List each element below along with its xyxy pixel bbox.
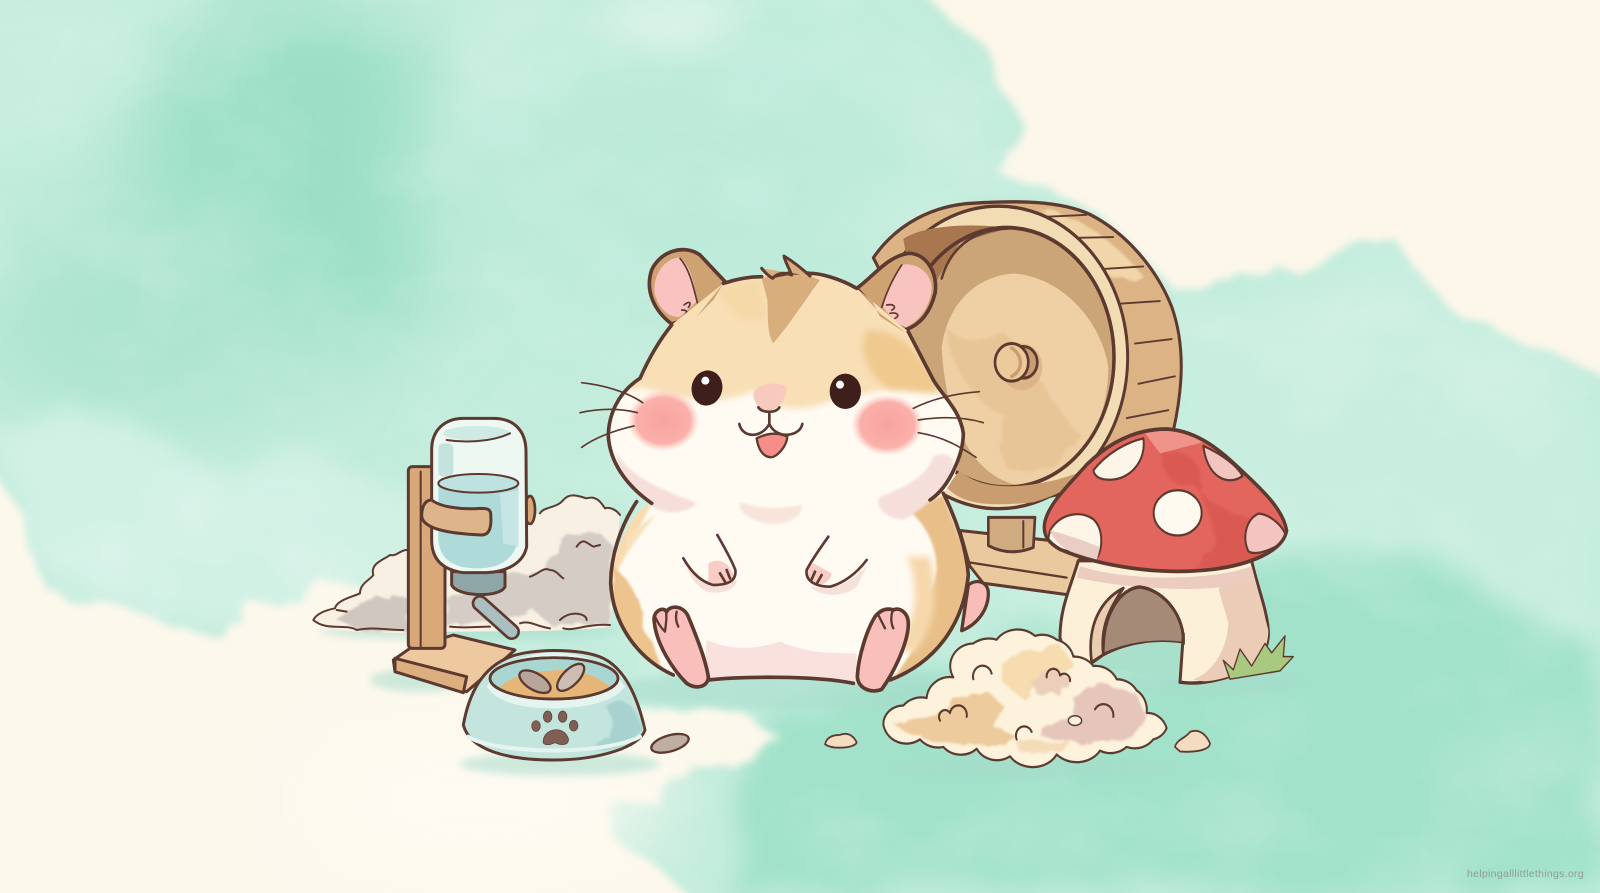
wheel drum [873,202,1181,506]
nose [753,384,787,411]
head stripe [762,274,820,343]
cream wash bottom left [0,425,780,893]
right ear [857,253,936,330]
hamster wheel [869,202,1181,509]
hamster [580,250,988,691]
water bottle [422,418,535,632]
water bottle stand [393,467,515,693]
mushroom door [1103,587,1183,655]
wheel back plate [942,274,1108,485]
bottle nozzle [480,603,512,632]
mushroom spots [1047,438,1287,559]
wheel stand [960,517,1080,596]
left eye [688,368,726,408]
whiskers [580,383,983,457]
bottle glass [432,418,527,573]
loose seed [649,730,691,756]
litter pile right [883,630,1167,767]
wheel axle [1001,344,1042,390]
mouth [739,407,802,457]
left cheek [627,390,699,451]
bottle water [438,483,518,568]
mushroom house [1044,429,1287,683]
left foot [654,607,708,687]
left arm [683,535,735,585]
ground shadows [320,624,1305,780]
cream wash top right [905,0,1600,395]
wheel inner [899,228,1114,487]
bowl food [500,670,610,698]
litter crumb left [825,734,857,748]
body silhouette [608,273,968,683]
hind foot [962,582,988,631]
right cheek [851,394,923,456]
mushroom stem [1060,561,1268,683]
grey litter pile [313,495,620,633]
paw print [532,711,578,745]
left ear [649,250,727,324]
water bottle, litter and bowl group [313,418,691,760]
hair tuft [762,256,810,278]
watermark: helpingalllittlethings.org [1467,868,1584,880]
fur markings [600,270,973,687]
litter crumb [1175,731,1210,752]
food bowl [463,650,645,760]
wheel, mushroom and litter group [825,202,1293,767]
right arm [807,537,867,587]
wheel front rim [869,206,1128,509]
right eye [830,374,861,409]
sunflower seeds [516,659,589,698]
right foot [857,609,908,691]
body outline [608,273,968,683]
grass tuft [1223,636,1293,679]
mushroom cap [1044,429,1287,571]
bottle clip [422,500,491,535]
